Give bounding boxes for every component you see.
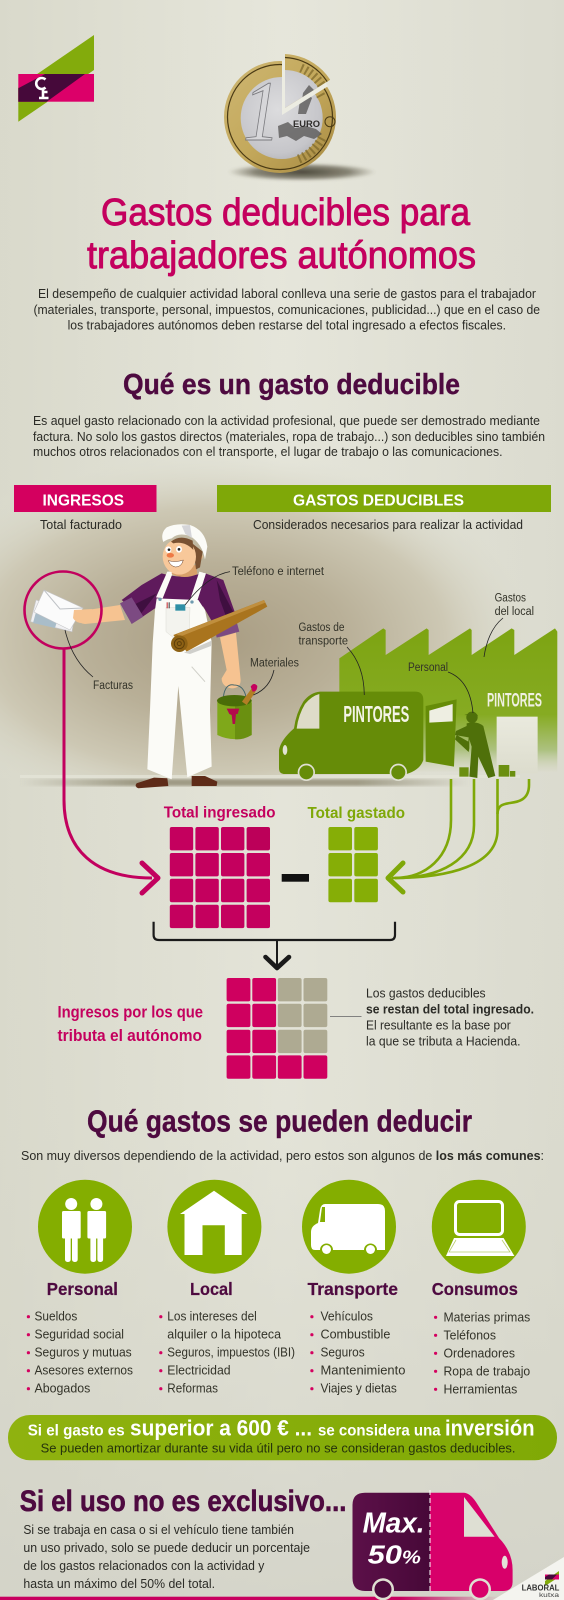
callout: inversion banner: Se pueden amortizar durante su vida útil pero no se consideran gastos deducibles. [41,1441,515,1456]
non-exclusive use text: Si se trabaja en casa o si el vehículo tiene también [23,1522,294,1537]
callout: inversion banner: se considera una [318,1423,441,1440]
icon: transporte [302,1180,396,1274]
column: transporte: Mantenimiento [320,1364,405,1378]
subtitle: considerados necesarios: Considerados necesarios para realizar la actividad [253,518,523,532]
callout: inversion banner: inversión [445,1416,534,1441]
logo: Laboral Kutxa mark [18,35,94,122]
explanation of result: Los gastos deducibles [366,987,486,1001]
icon: one euro coin with slice [224,54,373,182]
van [279,692,457,781]
heading: qué es un gasto deducible: Qué es un gasto deducible [123,369,460,401]
labels on illustration: Teléfono e internet [232,566,325,578]
non-exclusive use text: hasta un máximo del 50% del total. [23,1576,215,1591]
column: consumos: Consumos [432,1279,518,1299]
labels on illustration: del local [495,606,534,618]
labels on illustration: Gastos [495,593,526,605]
leader lines [65,618,503,713]
bracket and down arrow [154,922,395,968]
bottom pink line [0,1597,500,1600]
heading: si el uso no es exclusivo: Si el uso no es exclusivo... [20,1485,346,1518]
non-exclusive use text: de los gastos relacionados con la actividad y [23,1558,265,1573]
head [172,565,197,577]
explanation of result [330,987,534,1048]
brown glow backdrop and floor [0,440,564,786]
column: local: Reformas [167,1382,218,1396]
factory building [339,628,557,773]
green expense arrows [388,779,529,892]
title: trabajadores autónomos [87,235,476,277]
explanation of result: se restan del total ingresado. [366,1003,534,1017]
column: local: alquiler o la hipoteca [167,1328,281,1342]
column: consumos [432,1279,530,1396]
label: ingresos por los que tributa: tributa el autónomo [58,1026,202,1045]
callout: inversion banner: superior a 600 € ... [130,1416,312,1441]
explanation of result: la que se tributa a Hacienda. [366,1034,520,1048]
minus sign [282,874,309,882]
truck: max 50% [352,1490,513,1600]
definition text [33,414,545,459]
intro text: los trabajadores autónomos deben restarse del total ingresado a efectos fiscales. [68,318,506,332]
pink circle, invoices and income arrow [24,572,158,893]
column: local: Los intereses del [167,1310,257,1324]
intro text: El desempeño de cualquier actividad laboral conlleva una serie de gastos para el trabajador [38,287,536,301]
labels on illustration [93,566,534,692]
intro text: (materiales, transporte, personal, impuestos, comunicaciones, publicidad...) que en el caso de [34,303,540,317]
icon: personal [38,1180,132,1274]
hand side arm [75,605,125,624]
column: transporte [308,1279,405,1396]
banner: gastos deducibles [217,485,551,512]
max label: Max. [363,1507,424,1539]
column: transporte: Viajes y dietas [320,1382,397,1396]
shirt [122,573,237,627]
definition text: factura. No solo los gastos directos (materiales, ropa de trabajo...) son deducibles sino también [33,430,545,444]
icon: consumos [432,1180,526,1274]
grid: total ingresado [170,827,270,928]
paper roll [173,600,267,652]
subtitle: total facturado: Total facturado [40,518,122,532]
explanation of result: El resultante es la base por [366,1018,511,1032]
column: consumos: Ropa de trabajo [444,1364,530,1378]
footer logo: Laboral Kutxa: LABORAL [522,1584,560,1593]
footer logo: Laboral Kutxa: kutxa [539,1592,559,1599]
column: local: Electricidad [167,1364,231,1378]
column: consumos: Herramientas [444,1382,517,1396]
right arm and hand [220,633,241,688]
column: consumos: Ordenadores [444,1346,515,1360]
labels on illustration: Personal [408,662,448,674]
column: personal: Personal [47,1279,118,1299]
worker unloading van [455,712,515,778]
labels on illustration: Gastos de [298,622,344,634]
column: local [159,1279,295,1396]
column: personal [27,1279,133,1396]
invoices [31,590,83,632]
numeral on coin: 1 [243,63,280,159]
definition text: Es aquel gasto relacionado con la actividad profesional, que puede ser demostrado mediante [33,414,540,428]
label: ingresos por los que tributa [58,1003,203,1045]
heading: qué gastos se pueden deducir: Qué gastos se pueden deducir [87,1104,472,1139]
column: personal: Asesores externos [34,1364,133,1378]
column: personal: Abogados [34,1382,90,1396]
label: ingresos por los que tributa: Ingresos por los que [58,1003,203,1022]
painter character [75,524,274,788]
icon: one euro coin with slice: EURO [293,119,320,129]
title [87,192,476,277]
column: transporte: Seguros [320,1346,365,1360]
truck: max 50%: 50 % [368,1539,421,1569]
intro text [34,287,540,332]
column: consumos: Materias primas [444,1310,530,1324]
lead-in sentence: Son muy diversos dependiendo de la actividad, pero estos son algunos de los más comunes: [21,1149,544,1163]
paint bucket [223,685,246,697]
definition text: muchos otros relacionados con el transporte, el lugar de trabajo o las comunicaciones. [33,445,502,459]
footer logo: Laboral Kutxa [493,1557,564,1600]
icon: local [167,1180,261,1274]
column: transporte: Vehículos [320,1310,373,1324]
overalls [147,598,212,779]
label: total gastado: Total gastado [308,805,405,822]
grid: total gastado [328,827,378,902]
non-exclusive use text [23,1522,310,1591]
grid: result [227,978,327,1079]
banner: gastos deducibles: GASTOS DEDUCIBLES [293,492,464,509]
callout: inversion banner: Si el gasto es [28,1423,125,1440]
leader: telefono [185,572,230,605]
banner: ingresos: INGRESOS [42,492,124,509]
callout: inversion banner [8,1415,557,1460]
column: personal: Sueldos [34,1310,77,1324]
shoes [136,778,168,788]
labels on illustration: Materiales [250,658,299,670]
labels on illustration: Facturas [93,680,133,692]
label: total ingresado: Total ingresado [164,805,276,822]
column: transporte: Combustible [320,1328,390,1342]
van sign: PINTORES [343,701,409,727]
labels on illustration: transporte [298,636,348,648]
leader: materiales [253,670,274,695]
column: local: Local [190,1279,233,1299]
banner: ingresos [14,485,156,512]
column: transporte: Transporte [308,1279,398,1299]
column: consumos: Teléfonos [444,1328,496,1342]
column: personal: Seguridad social [34,1328,124,1342]
column: personal: Seguros y mutuas [34,1346,132,1360]
cuffs [120,597,143,624]
non-exclusive use text: un uso privado, solo se puede deducir un porcentaje [23,1540,310,1555]
title: Gastos deducibles para [101,192,471,234]
column: local: Seguros, impuestos (IBI) [167,1346,295,1360]
